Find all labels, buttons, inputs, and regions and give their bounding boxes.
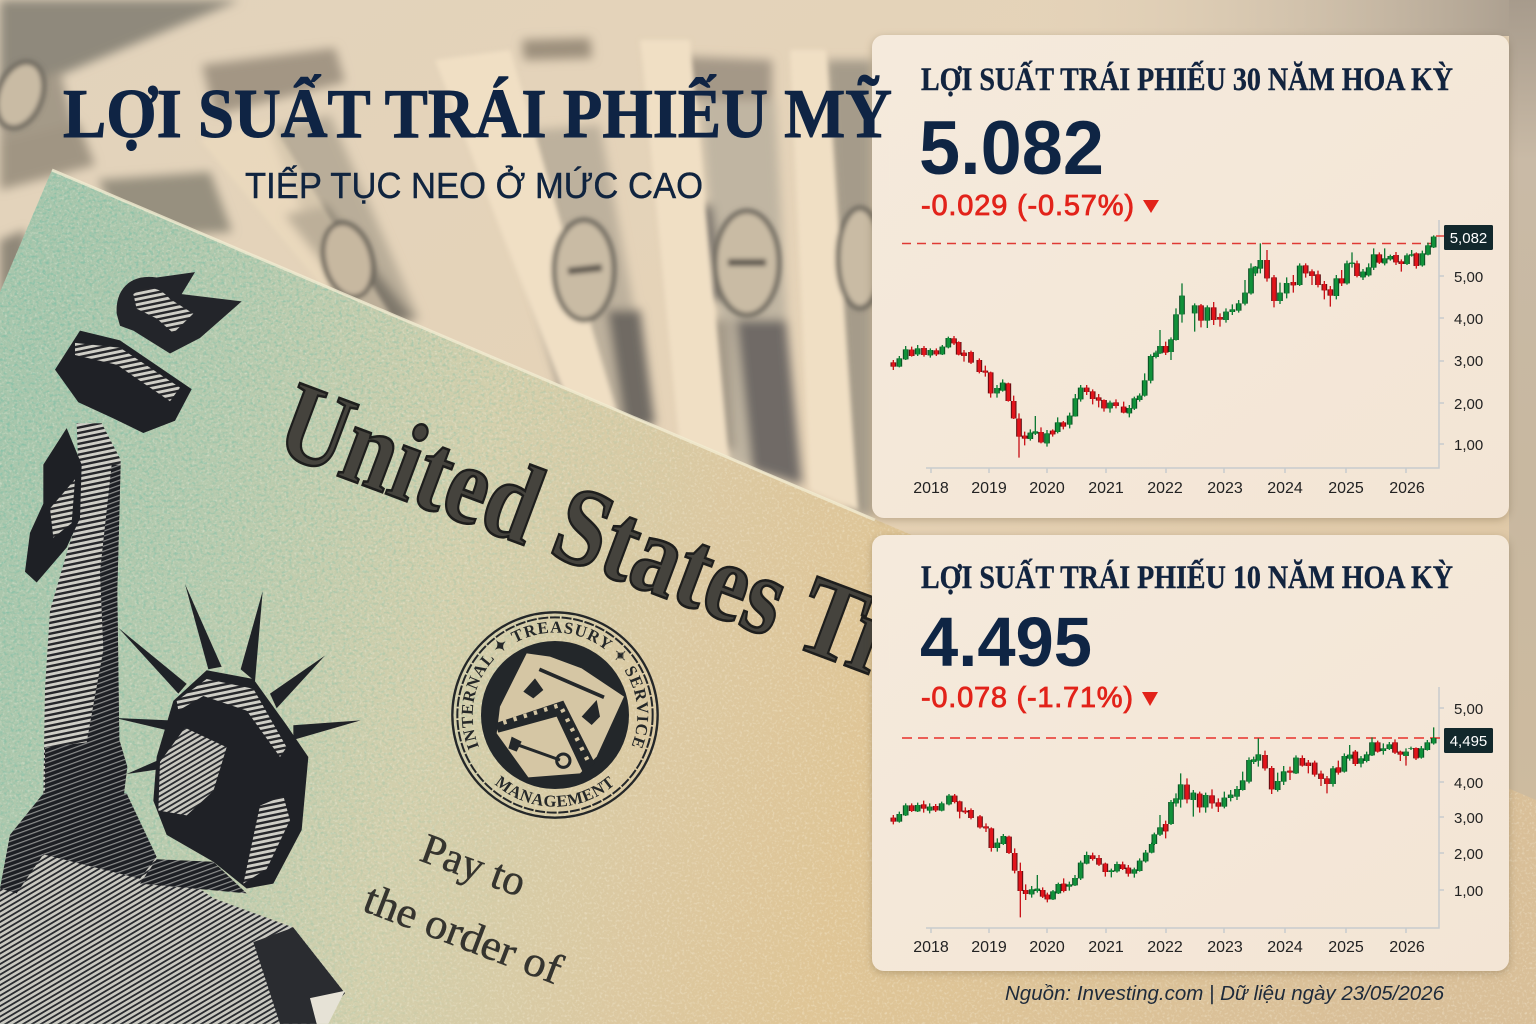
y axis labels: 4,00 <box>1454 311 1483 328</box>
y axis labels <box>1454 269 1483 454</box>
x axis labels: 2019 <box>971 480 1007 497</box>
heading: 30-year: LỢI SUẤT TRÁI PHIẾU 30 NĂM HOA KỲ <box>921 59 1453 98</box>
x axis labels: 2025 <box>1328 939 1364 956</box>
price marker 5,082 <box>1436 225 1493 250</box>
price marker 4,495 <box>1444 728 1493 753</box>
x axis labels: 2022 <box>1147 939 1183 956</box>
seal ring text: INTERNAL ✦ TREASURY ✦ SERVICE <box>462 622 648 750</box>
x axis labels: 2020 <box>1029 939 1065 956</box>
x axis labels: 2020 <box>1029 480 1065 497</box>
icon: down triangle <box>1143 200 1159 213</box>
candles <box>893 727 1434 917</box>
y axis labels: 1,00 <box>1454 883 1483 900</box>
y axis labels: 3,00 <box>1454 353 1483 370</box>
torch flame <box>117 272 242 354</box>
y axis labels: 4,00 <box>1454 775 1483 792</box>
x axis labels: 2024 <box>1267 480 1303 497</box>
x axis labels: 2021 <box>1088 480 1124 497</box>
chart: 10-year candlesticks <box>893 687 1493 956</box>
x axis labels: 2021 <box>1088 939 1124 956</box>
value: 4.495: 4.495 <box>920 603 1092 681</box>
crown rays <box>115 584 361 774</box>
check text: United States Treasury: United States Tr <box>263 358 916 702</box>
y axis labels: 2,00 <box>1454 846 1483 863</box>
head <box>153 670 308 888</box>
main title: LỢI SUẤT TRÁI PHIẾU MỸ <box>63 74 892 153</box>
icon: down triangle <box>1142 692 1158 706</box>
x axis labels: 2024 <box>1267 939 1303 956</box>
y axis labels: 5,00 <box>1454 269 1483 286</box>
candles <box>893 235 1434 458</box>
x axis labels: 2022 <box>1147 480 1183 497</box>
panel: 10-year yield <box>872 535 1509 971</box>
x axis labels: 2019 <box>971 939 1007 956</box>
current level line <box>902 737 1444 739</box>
arm and hand <box>25 423 127 793</box>
x axis labels: 2026 <box>1389 480 1425 497</box>
y axis labels: 5,00 <box>1454 701 1483 718</box>
y axis labels: 2,00 <box>1454 396 1483 413</box>
y axis labels: 1,00 <box>1454 437 1483 454</box>
x axis labels: 2018 <box>913 480 949 497</box>
seal ring text <box>462 622 648 807</box>
x axis labels <box>913 480 1425 497</box>
seal shield <box>495 653 624 777</box>
check text: pay to: Pay to <box>415 825 532 906</box>
current level line <box>902 242 1436 244</box>
heading: 10-year: LỢI SUẤT TRÁI PHIẾU 10 NĂM HOA KỲ <box>921 557 1453 596</box>
price marker 4,495: 4,495 <box>1450 733 1487 750</box>
y axis labels: 3,00 <box>1454 810 1483 827</box>
x axis labels: 2023 <box>1207 480 1243 497</box>
value: 5.082: 5.082 <box>919 106 1104 191</box>
y axis labels <box>1454 701 1483 900</box>
check text: the order of: the order of <box>357 875 569 994</box>
torch crown <box>55 331 192 433</box>
x axis labels: 2023 <box>1207 939 1243 956</box>
price marker 5,082: 5,082 <box>1450 230 1487 247</box>
x axis labels: 2025 <box>1328 480 1364 497</box>
robe <box>0 793 345 1024</box>
seal ring text: MANAGEMENT <box>494 775 614 807</box>
panel: 30-year yield <box>872 35 1509 518</box>
source note: Nguồn: Investing.com | Dữ liệu ngày 23/05/2026 <box>1005 983 1445 1005</box>
change: 30-year: -0.029 (-0.57%) <box>921 190 1134 222</box>
change: 10-year: -0.078 (-1.71%) <box>921 682 1133 714</box>
subtitle: TIẾP TỤC NEO Ở MỨC CAO <box>245 164 703 206</box>
treasury seal <box>451 611 659 819</box>
x axis labels: 2018 <box>913 939 949 956</box>
chart: 30-year candlesticks <box>893 220 1493 497</box>
x axis labels <box>913 939 1425 956</box>
statue of liberty engraving <box>0 272 361 1024</box>
x axis labels: 2026 <box>1389 939 1425 956</box>
